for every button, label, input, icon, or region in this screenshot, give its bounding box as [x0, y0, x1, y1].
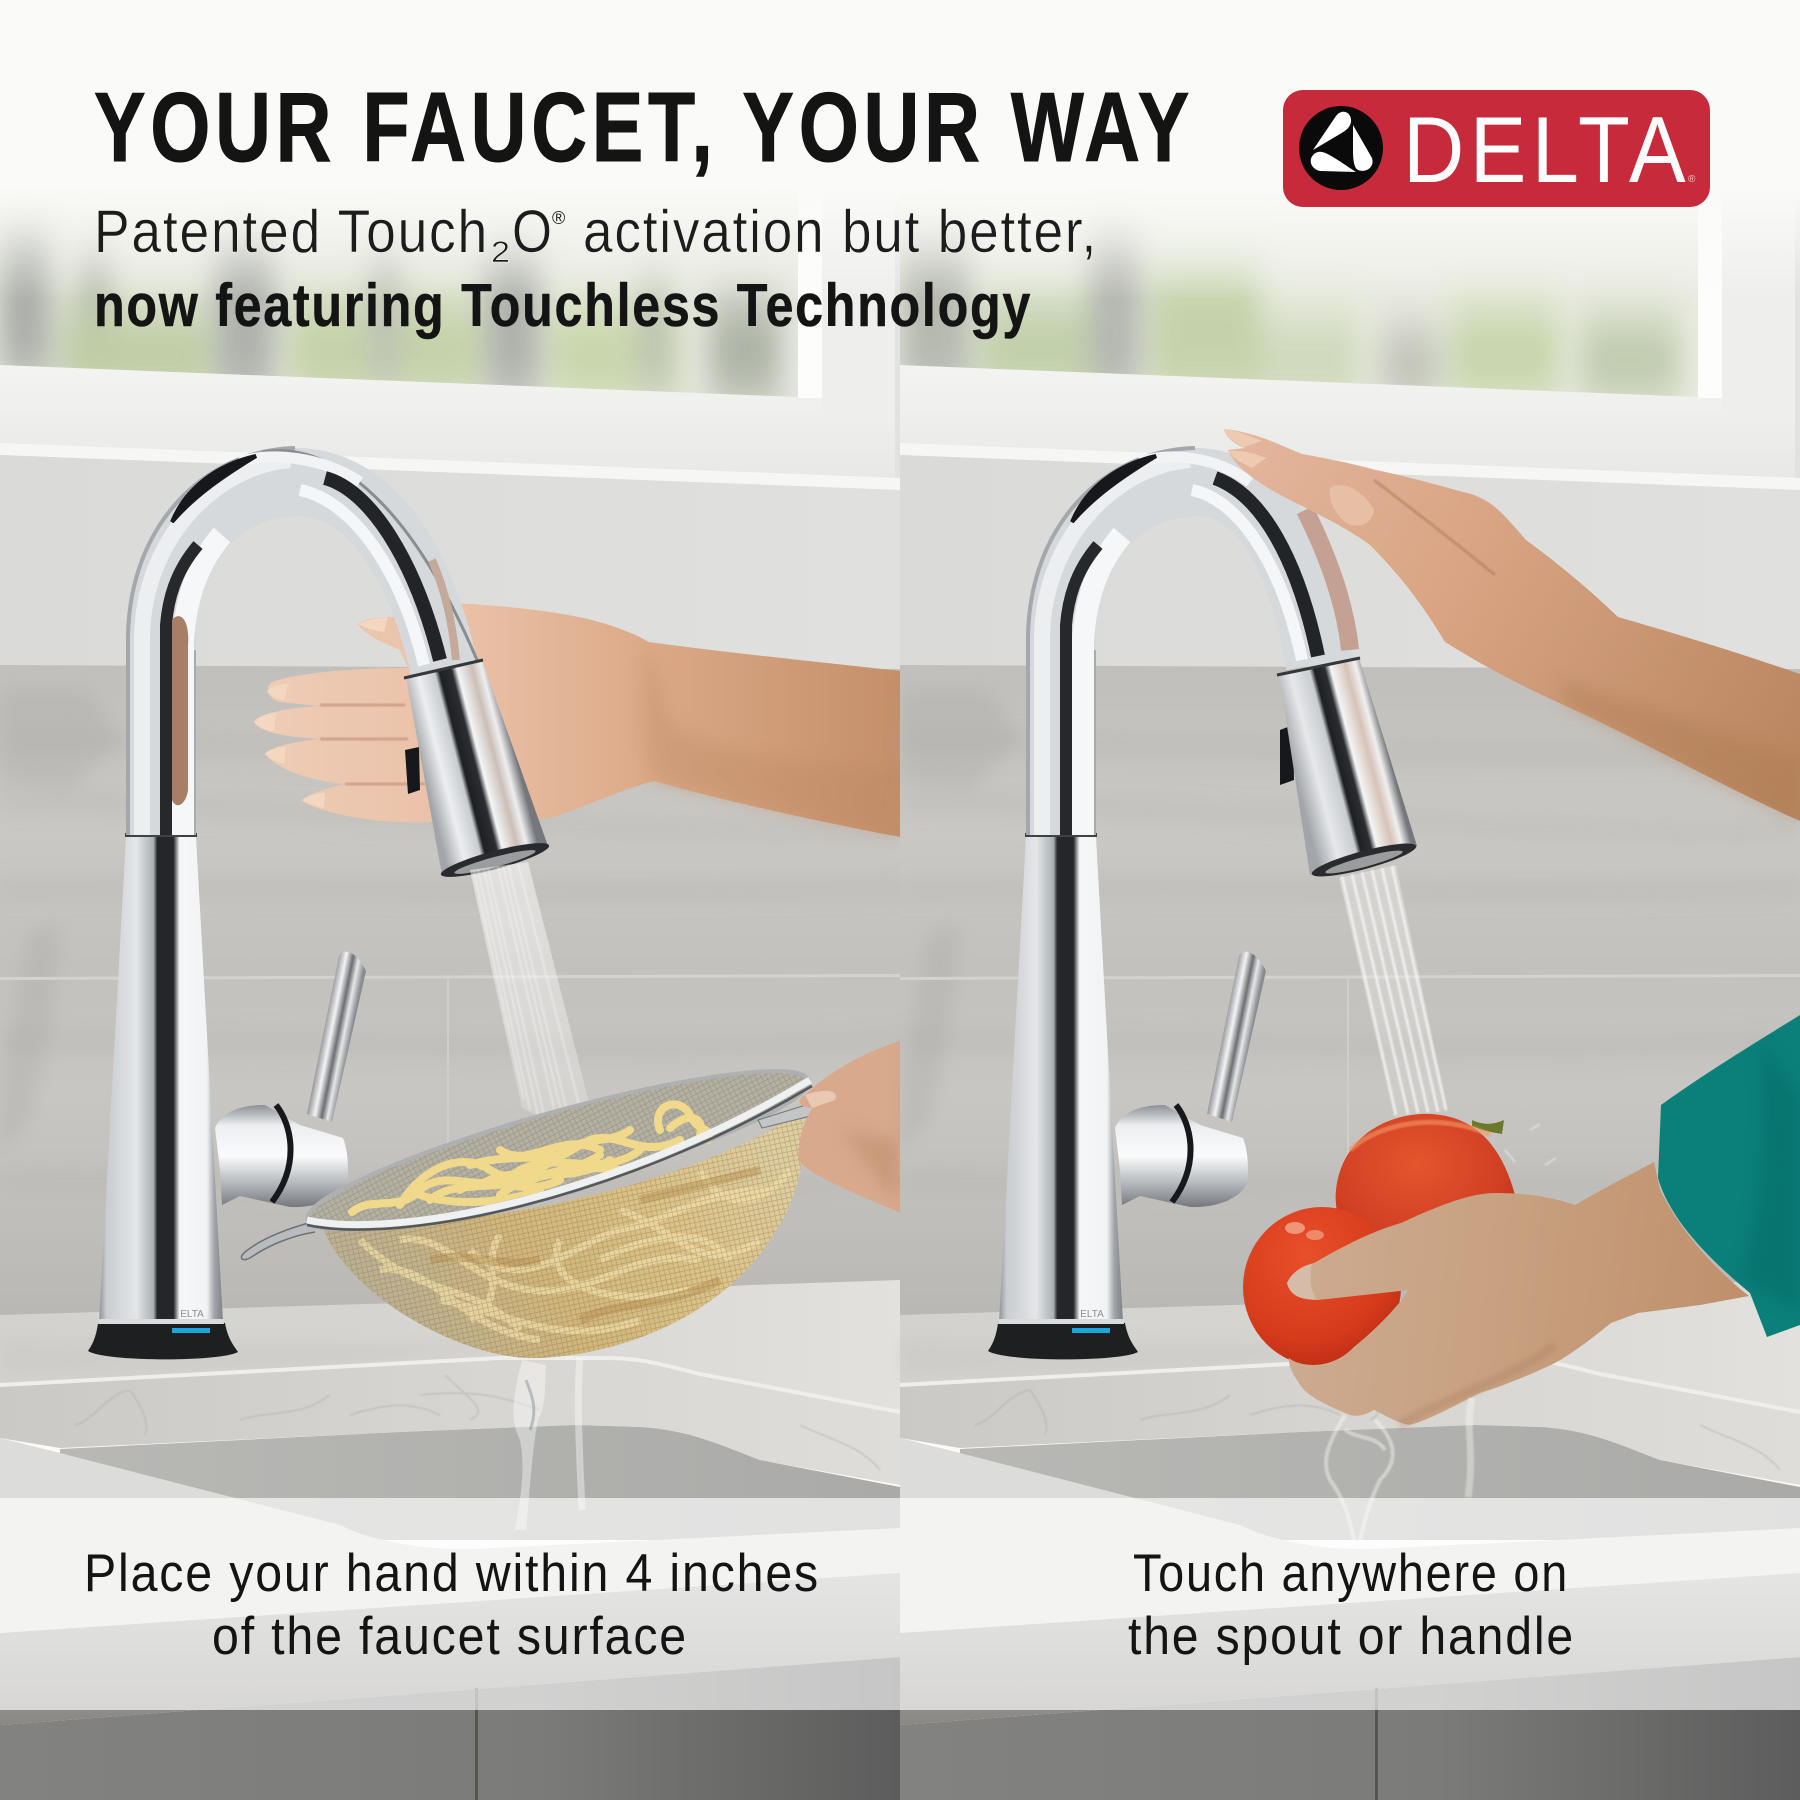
teal sleeve	[1658, 1015, 1800, 1337]
hand touching the top of the spout	[1224, 429, 1800, 821]
caption text, left	[84, 1544, 820, 1666]
caption band, right	[900, 1498, 1800, 1710]
subtitle line one: activation but better,	[583, 198, 1098, 265]
tapered lower column: ELTA	[180, 1309, 204, 1320]
tapered lower column	[98, 833, 224, 1324]
subtitle line two: now featuring Touchless Technology	[94, 272, 1032, 339]
top tomato stem	[1472, 1120, 1504, 1134]
blurred garden view through window, right	[900, 218, 1698, 397]
caption band, left	[0, 1498, 900, 1710]
arched spout right side, left faucet	[172, 451, 477, 668]
mesh strainer bowl with pasta	[241, 1041, 900, 1358]
icon: Delta triangle mark	[1299, 106, 1383, 190]
bottom tomato	[1243, 1207, 1401, 1367]
room background: window frame, wall, tile, counter and sink	[0, 0, 900, 1800]
faucet body, right copy	[988, 448, 1266, 1359]
noodles seen through mesh	[360, 1170, 790, 1340]
strainer rim	[297, 1043, 819, 1257]
strainer handle and holding hand	[758, 1041, 900, 1213]
top fade over window scene	[0, 0, 1800, 300]
room background, right copy	[900, 0, 1800, 1800]
pull-down spray head, right	[1277, 658, 1418, 883]
hand holding tomatoes	[1287, 1162, 1749, 1425]
logo: Delta: ®	[1688, 174, 1696, 185]
caption text, left: Place your hand within 4 inches	[84, 1544, 820, 1603]
water running off hand	[1326, 1124, 1556, 1545]
pull-down spray head	[404, 660, 551, 883]
noodles at top of bowl	[352, 1104, 709, 1212]
caption text, right	[1128, 1544, 1575, 1666]
handle lever	[307, 952, 366, 1122]
water spray, right	[1339, 865, 1448, 1117]
tomatoes under running water	[1243, 1114, 1515, 1367]
mesh overlay	[322, 1110, 805, 1358]
subtitle line one: Patented Touch	[94, 198, 489, 265]
inside back wall of bowl	[297, 1043, 819, 1257]
caption text, right: Touch anywhere on	[1133, 1544, 1569, 1603]
arched spout right side, right faucet	[1072, 456, 1350, 664]
icon: black touchless base with blue LED	[88, 1319, 238, 1359]
strainer hook	[241, 1222, 315, 1260]
subtitle line one: O	[512, 198, 552, 265]
subtitle line one	[94, 198, 1098, 269]
water spray, left	[470, 862, 600, 1146]
subtitle line one: ®	[552, 208, 565, 228]
panel: left, hand within 4 inches	[0, 209, 900, 1800]
arched upper spout, left half	[128, 448, 295, 835]
caption text, right: the spout or handle	[1128, 1607, 1575, 1666]
reflection of hand in riser	[172, 616, 188, 805]
bowl body mesh	[322, 1110, 805, 1358]
water dripping from strainer	[513, 1358, 582, 1530]
hand held behind the spray head	[254, 604, 900, 837]
side handle hub	[215, 1105, 348, 1207]
logo: Delta	[1283, 90, 1710, 207]
top tomato	[1336, 1114, 1515, 1260]
subtitle line one: 2	[491, 236, 510, 269]
panel: right, touch anywhere on the spout or handle	[898, 214, 1800, 1800]
caption text, left: of the faucet surface	[212, 1607, 688, 1666]
title: YOUR FAUCET, YOUR WAY	[94, 72, 1194, 182]
wordmark: DELTA	[1403, 97, 1691, 202]
faucet body: base, tapered column, arched spout, handle	[88, 448, 366, 1359]
blurred garden view through window, left	[0, 212, 798, 397]
